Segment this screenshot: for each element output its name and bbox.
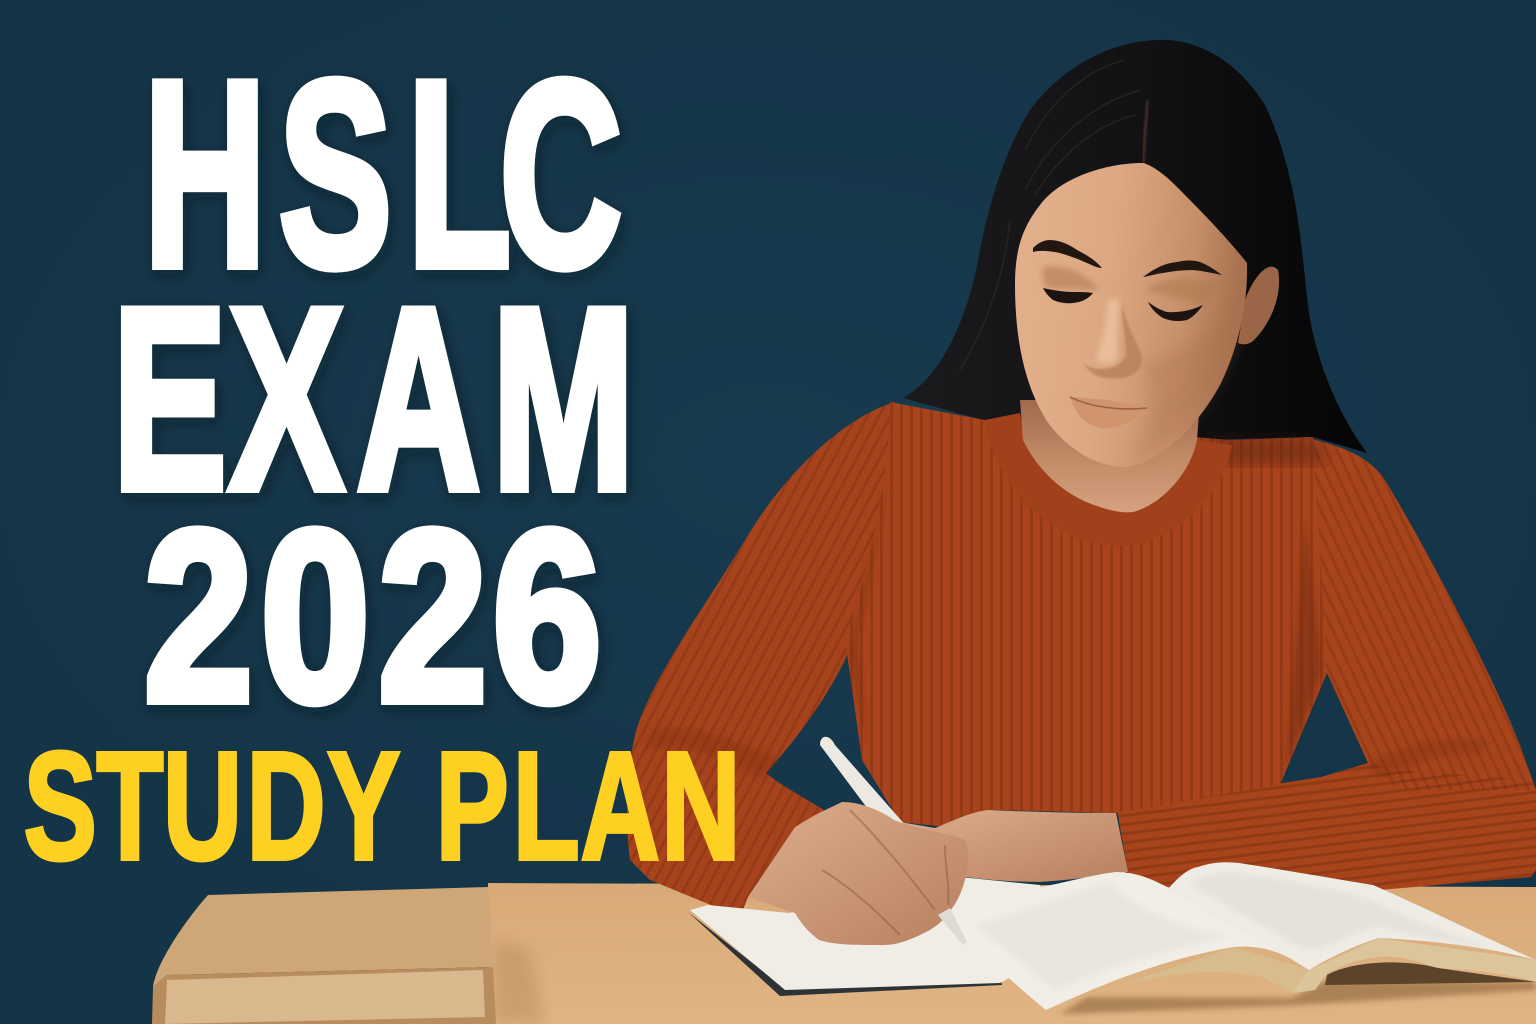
forearm ribs bbox=[1116, 763, 1536, 890]
table bbox=[488, 883, 1536, 1024]
book pages edge bbox=[165, 970, 485, 1024]
nose highlight bbox=[1096, 300, 1120, 364]
sleeve fold shadow bbox=[645, 727, 780, 780]
writing hand bbox=[748, 802, 969, 945]
brow right bbox=[1143, 260, 1222, 277]
right arm sleeve bbox=[1116, 437, 1536, 890]
title: HSLC EXAM 2026 bbox=[113, 26, 634, 752]
title line: HSLC: HSLC bbox=[144, 26, 622, 321]
notebook pages bbox=[690, 877, 1060, 990]
right page text shade bbox=[1190, 872, 1500, 950]
ear bbox=[1238, 267, 1279, 344]
right hand resting bbox=[900, 810, 1128, 882]
book cover top bbox=[153, 887, 493, 987]
eye socket shading bbox=[1042, 266, 1222, 305]
brow left bbox=[1033, 240, 1102, 268]
right page bbox=[1169, 862, 1536, 970]
cheek shadow bbox=[1130, 300, 1243, 465]
torso ribs bbox=[845, 402, 1327, 827]
face bbox=[1015, 163, 1247, 467]
pen tip bbox=[938, 908, 967, 945]
pen upper body bbox=[820, 737, 914, 848]
eye left bbox=[1043, 288, 1093, 303]
book lower cover bbox=[152, 967, 496, 1024]
woman figure bbox=[627, 40, 1536, 917]
page block right bbox=[1292, 938, 1536, 993]
hair shadow on shoulder bbox=[1200, 435, 1330, 465]
shadow under book bbox=[1060, 980, 1536, 1014]
nose shade bbox=[1083, 305, 1142, 378]
collar bbox=[985, 413, 1232, 546]
subtitle: STUDY PLAN: STUDY PLAN bbox=[24, 721, 741, 892]
underarm shadow right bbox=[1285, 520, 1322, 770]
left arm sleeve bbox=[627, 402, 895, 917]
book shadow bbox=[493, 940, 545, 1024]
hand shape bbox=[748, 802, 969, 945]
page block left bbox=[1046, 947, 1310, 1010]
sleeve ribs bbox=[627, 402, 895, 917]
hair shine strands bbox=[960, 60, 1140, 370]
upper arm ribs bbox=[1304, 437, 1536, 790]
nose bbox=[1083, 300, 1142, 378]
neck bbox=[1020, 400, 1200, 512]
title line: 2026: 2026 bbox=[144, 480, 601, 752]
left page text shade bbox=[975, 882, 1235, 990]
torso base bbox=[845, 402, 1327, 827]
lip shape bbox=[1070, 397, 1147, 428]
eye right bbox=[1148, 302, 1203, 321]
notebook dark edge bbox=[688, 912, 1002, 996]
open book bbox=[950, 862, 1536, 1014]
lips bbox=[1070, 397, 1147, 428]
dark gap bbox=[1325, 962, 1536, 985]
elbow fold shadow bbox=[1368, 739, 1490, 780]
title line: EXAM: EXAM bbox=[113, 255, 634, 543]
left page bbox=[950, 872, 1309, 1010]
underarm shadow left bbox=[850, 470, 890, 750]
finger creases bbox=[822, 810, 948, 935]
hair bbox=[903, 40, 1367, 453]
hair parting bbox=[1143, 100, 1148, 165]
sleeve base bbox=[1116, 437, 1536, 890]
torso bbox=[845, 402, 1330, 827]
sleeve base bbox=[627, 402, 895, 917]
notebook bbox=[688, 877, 1060, 996]
lip line bbox=[1070, 397, 1147, 409]
closed book on table bbox=[152, 887, 545, 1024]
